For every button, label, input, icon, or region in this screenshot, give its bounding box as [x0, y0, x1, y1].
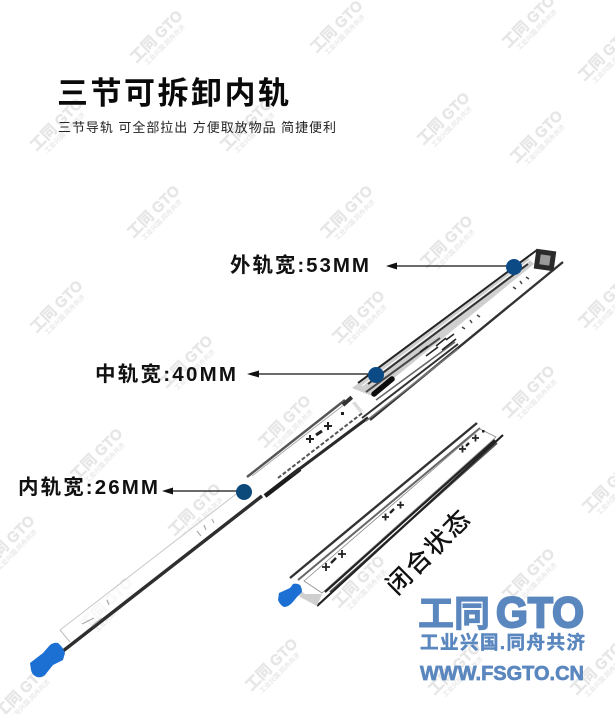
label: middle rail width [95, 362, 372, 386]
watermark pattern: 工同 GTO [499, 362, 559, 421]
watermark pattern: 工同 GTO [425, 639, 485, 698]
watermark pattern: 工业兴国.同舟共济 [257, 650, 302, 695]
middle rail [247, 397, 373, 496]
watermark pattern: 工同 GTO [217, 95, 277, 154]
watermark pattern: 工业兴国.同舟共济 [180, 495, 225, 540]
watermark pattern: 工业兴国.同舟共济 [42, 110, 87, 155]
logo chinese mark: 工同 [418, 593, 490, 634]
dot: middle rail [368, 367, 384, 383]
extended slide rail [30, 249, 563, 677]
watermark pattern: 工业兴国.同舟共济 [42, 292, 87, 337]
outer rail [350, 249, 563, 421]
watermark pattern: 工同 GTO [127, 7, 187, 66]
label: inner rail width: 内轨宽:26MM [18, 475, 158, 499]
watermark pattern: 工业兴国.同舟共济 [322, 12, 367, 57]
watermark pattern: 工同 GTO [317, 182, 377, 241]
label: inner rail width [18, 475, 240, 499]
watermark pattern: 工业兴国.同舟共济 [232, 110, 277, 155]
blue handle [30, 643, 65, 677]
watermark pattern: 工同 GTO [27, 277, 87, 336]
watermark pattern: 工同 GTO [27, 95, 87, 154]
watermark pattern: 工同 GTO [67, 425, 127, 484]
watermark pattern: 工同 GTO [157, 332, 217, 391]
watermark pattern: 工业兴国.同舟共济 [172, 347, 217, 392]
arrow: middle rail [247, 370, 372, 378]
watermark pattern: 工业兴国.同舟共济 [522, 122, 567, 167]
watermark pattern: 工同 GTO [507, 107, 567, 166]
closed state label: 闭合状态 [381, 504, 477, 600]
watermark pattern: 工业兴国.同舟共济 [142, 22, 187, 67]
watermark pattern: 工业兴国.同舟共济 [432, 227, 477, 272]
watermark pattern: 工业兴国.同舟共济 [344, 567, 389, 612]
watermark pattern: 工同 GTO [499, 545, 559, 604]
logo url: WWW.FSGTO.CN [420, 663, 584, 685]
watermark pattern: 工业兴国.同舟共济 [440, 654, 485, 699]
watermark pattern: 工同 GTO [165, 480, 225, 539]
watermark pattern: 工同 GTO [417, 212, 477, 271]
subtitle: 三节导轨 可全部拉出 方便取放物品 简捷便利 [58, 120, 336, 135]
watermark pattern: 工业兴国.同舟共济 [514, 560, 559, 605]
watermark pattern: 工业兴国.同舟共济 [270, 407, 315, 452]
arrow: inner rail [162, 488, 240, 494]
inner rail [60, 491, 262, 652]
logo [418, 589, 585, 685]
dot: outer rail [506, 259, 522, 275]
watermark pattern: 工业兴国.同舟共济 [344, 302, 389, 347]
watermark pattern: 工业兴国.同舟共济 [332, 197, 377, 242]
logo slogan: 工业兴国.同舟共济 [420, 632, 585, 653]
title: 三节可拆卸内轨 [57, 76, 289, 111]
label: outer rail width [230, 253, 510, 277]
watermark pattern: 工业兴国.同舟共济 [514, 7, 559, 52]
watermark pattern: 工业兴国.同舟共济 [92, 589, 137, 634]
watermark pattern: 工业兴国.同舟共济 [139, 197, 184, 242]
watermark pattern: 工同 GTO [329, 287, 389, 346]
watermark pattern: 工业兴国.同舟共济 [82, 440, 127, 485]
watermark pattern: 工同 GTO [242, 635, 302, 694]
label: outer rail width: 外轨宽:53MM [230, 253, 369, 277]
watermark pattern: 工同 GTO [124, 182, 184, 241]
latch [534, 249, 556, 271]
watermark pattern: 工同 GTO [255, 392, 315, 451]
logo GTO: GTO [496, 589, 584, 637]
dot: inner rail [236, 484, 252, 500]
arrow: outer rail [386, 262, 510, 270]
blue handle closed [278, 584, 302, 607]
watermark pattern: 工同 GTO [414, 89, 474, 148]
closed slide rail [278, 422, 503, 607]
watermark pattern: 工同 GTO [77, 574, 137, 633]
label: middle rail width: 中轨宽:40MM [95, 362, 236, 386]
watermark pattern: 工业兴国.同舟共济 [514, 377, 559, 422]
watermark pattern: 工同 GTO [329, 552, 389, 611]
watermark pattern: 工业兴国.同舟共济 [429, 104, 474, 149]
